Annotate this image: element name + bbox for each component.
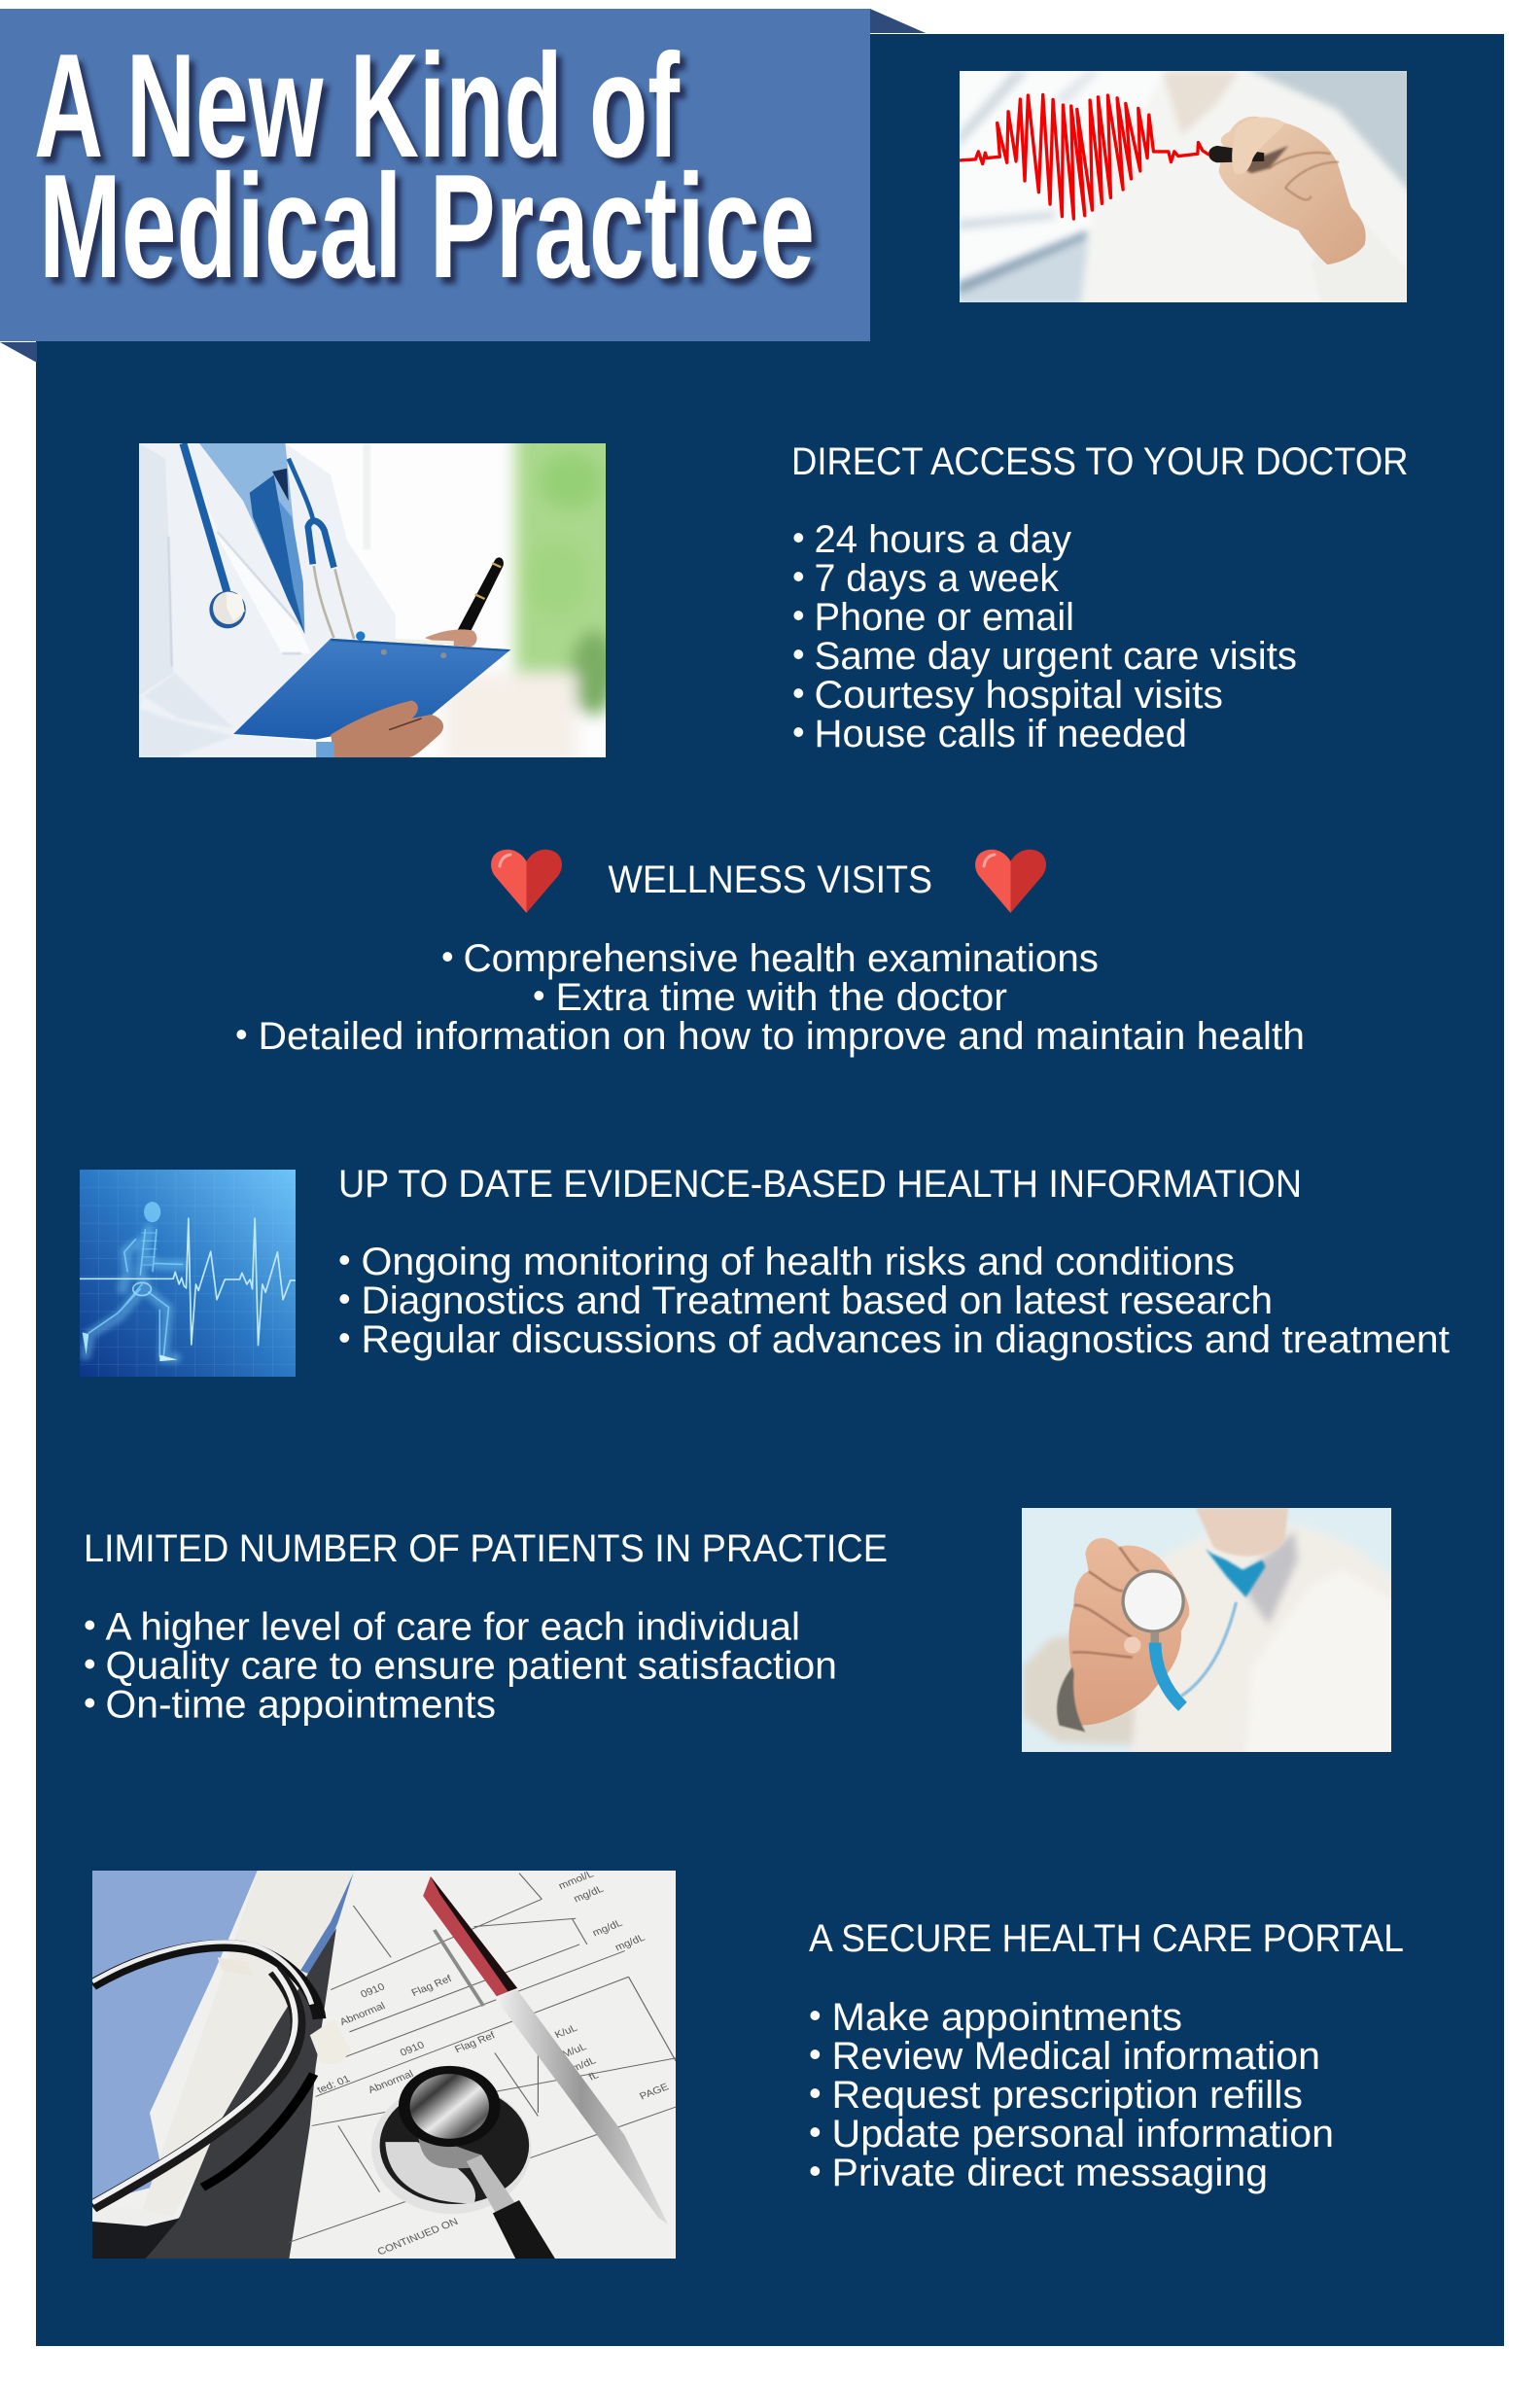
bullet list: Update personal information xyxy=(832,2113,1334,2155)
heading: A SECURE HEALTH CARE PORTAL xyxy=(809,1917,1404,1960)
pen xyxy=(423,1876,517,1996)
bullet list: • xyxy=(441,936,454,976)
report small print: CONTINUED ON xyxy=(375,2217,460,2258)
hand xyxy=(331,701,443,757)
stethoscope tubing xyxy=(92,1945,319,2019)
bullet list: Extra time with the doctor xyxy=(556,976,1007,1019)
report small print: fL xyxy=(587,2070,601,2083)
upper fingers xyxy=(425,629,477,647)
report small print: Flag Ref xyxy=(453,2030,498,2055)
bullet list: • xyxy=(84,1604,96,1645)
bullet list xyxy=(792,517,1297,755)
report small print: mg/dL xyxy=(613,1932,648,1953)
bullet list: Quality care to ensure patient satisfaction xyxy=(105,1645,837,1688)
bullet list: • xyxy=(792,712,805,752)
sleeve cuff xyxy=(1312,208,1407,302)
bullet list: • xyxy=(235,1014,248,1054)
banner bottom-left fold xyxy=(0,342,37,363)
bullet list: • xyxy=(533,975,545,1015)
report small print: Abnormal xyxy=(338,2001,387,2028)
report small print: M/uL xyxy=(561,2042,588,2060)
report small print: 0910 xyxy=(359,1981,387,2000)
bullet list: • xyxy=(809,1995,822,2035)
report small print: 0910 xyxy=(399,2040,427,2058)
photo: doctor holding out stethoscope xyxy=(1022,1508,1391,1752)
icon: right heart xyxy=(975,850,1046,913)
bullet list: • xyxy=(792,634,805,674)
bullet list: • xyxy=(809,2034,822,2074)
heading: UP TO DATE EVIDENCE-BASED HEALTH INFORMATION xyxy=(338,1163,1302,1206)
bullet list: Make appointments xyxy=(832,1996,1182,2039)
clipboard xyxy=(233,639,510,740)
report small print: mmol/L xyxy=(557,1869,596,1892)
bullet list: • xyxy=(809,2151,822,2190)
bullet list: • xyxy=(809,2112,822,2152)
bullet list: • xyxy=(792,517,805,557)
bullet list: • xyxy=(338,1279,351,1318)
bullet list xyxy=(809,1995,1334,2194)
bullet list: Comprehensive health examinations xyxy=(463,937,1099,980)
report small print: gm/dL xyxy=(564,2055,598,2077)
white sheets xyxy=(142,1867,357,2217)
section: limited number of patients in practice xyxy=(84,1527,888,1727)
report small print: ted: 01 xyxy=(315,2074,352,2096)
photo: stethoscope and pen on lab report xyxy=(92,1869,676,2259)
bullet list: • xyxy=(809,2073,822,2113)
stethoscope disc xyxy=(1121,1569,1185,1633)
heading: WELLNESS VISITS xyxy=(609,858,932,901)
bullet list xyxy=(338,1240,1450,1361)
report small print xyxy=(315,1869,671,2258)
tie xyxy=(250,474,304,634)
shirt xyxy=(199,443,304,634)
heading: LIMITED NUMBER OF PATIENTS IN PRACTICE xyxy=(84,1527,888,1570)
bullet list: • xyxy=(792,673,805,713)
stethoscope xyxy=(183,443,227,592)
title banner xyxy=(0,9,926,363)
photo: doctor drawing heartbeat heart xyxy=(960,71,1407,302)
bullet list: House calls if needed xyxy=(815,713,1187,755)
bullet list: On-time appointments xyxy=(105,1684,496,1727)
banner top-right fold xyxy=(870,9,926,33)
icon: left heart xyxy=(491,850,562,913)
bullet list: 7 days a week xyxy=(815,557,1060,600)
folder xyxy=(89,1867,259,2203)
photo: x-ray runner with ECG trace xyxy=(80,1170,296,1377)
bullet list: Review Medical information xyxy=(832,2035,1320,2078)
bullet list: Phone or email xyxy=(815,596,1074,639)
coat xyxy=(139,443,396,757)
dark board xyxy=(146,1928,336,2259)
section: wellness visits xyxy=(235,850,1305,1058)
bullet list: 24 hours a day xyxy=(815,518,1071,561)
report small print: K/uL xyxy=(553,2022,579,2041)
bullet list: • xyxy=(338,1240,351,1279)
bullet list: A higher level of care for each individual xyxy=(105,1606,800,1649)
section: direct access to your doctor xyxy=(791,440,1408,755)
report lines xyxy=(289,1874,678,2242)
chest piece xyxy=(371,2083,531,2214)
title text: A New Kind of xyxy=(34,23,680,189)
bullet list: Private direct messaging xyxy=(832,2152,1268,2194)
hand xyxy=(1068,1538,1189,1726)
title text: Medical Practice xyxy=(39,144,815,309)
bullet list: Diagnostics and Treatment based on latest research xyxy=(362,1279,1273,1322)
banner rectangle xyxy=(0,9,870,341)
report small print: Abnormal xyxy=(367,2069,415,2096)
bullet list: Ongoing monitoring of health risks and conditions xyxy=(362,1241,1235,1283)
bullet list: Request prescription refills xyxy=(832,2074,1303,2117)
report small print: mg/dL xyxy=(572,1883,606,1905)
section: up to date evidence-based health information xyxy=(338,1163,1450,1361)
bullet list: • xyxy=(84,1643,96,1684)
bullet list: • xyxy=(84,1682,96,1723)
bullet list: Courtesy hospital visits xyxy=(815,674,1223,717)
bullet list: Same day urgent care visits xyxy=(815,635,1297,678)
heading: DIRECT ACCESS TO YOUR DOCTOR xyxy=(791,440,1408,483)
bullet list: • xyxy=(792,595,805,635)
bullet list: • xyxy=(792,556,805,596)
bullet list: Detailed information on how to improve and maintain health xyxy=(259,1015,1305,1058)
bullet list: • xyxy=(338,1317,351,1357)
section: a secure health care portal xyxy=(809,1917,1404,2194)
report small print: Flag Ref xyxy=(409,1973,455,1999)
report small print: PAGE xyxy=(638,2082,671,2102)
title text xyxy=(34,23,815,309)
bullet list: Regular discussions of advances in diagnostics and treatment xyxy=(362,1318,1450,1361)
bullet list xyxy=(84,1604,837,1727)
report small print: mg/dL xyxy=(591,1917,624,1939)
clip rivets xyxy=(381,649,387,655)
bullet list xyxy=(235,936,1305,1058)
photo: doctor with blue clipboard xyxy=(139,443,606,757)
pen xyxy=(457,557,504,632)
